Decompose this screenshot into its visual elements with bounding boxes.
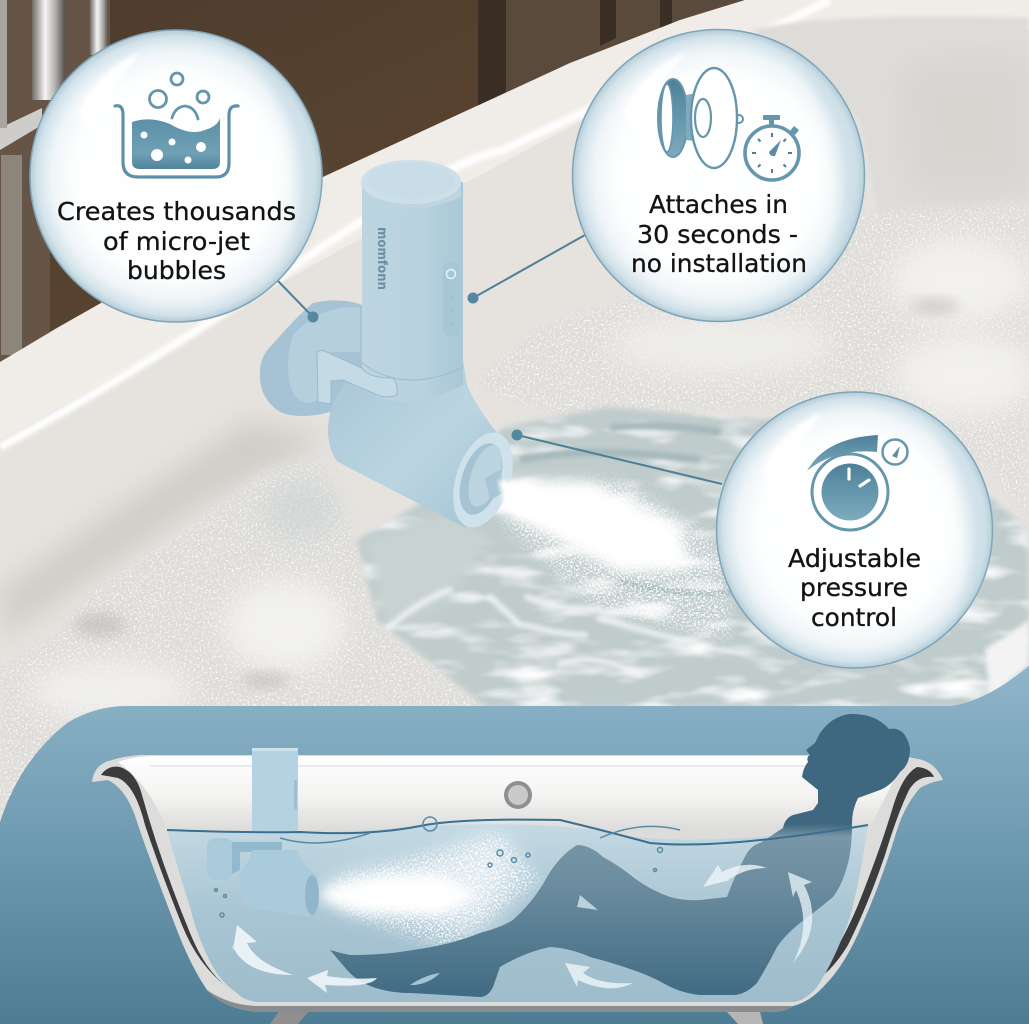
tub outer shell (92, 755, 943, 1012)
device cylinder above water (252, 748, 298, 832)
device elbow under water (207, 838, 319, 917)
bubble 2 text (631, 190, 807, 278)
foam left highlights (30, 480, 345, 718)
icon: pressure dial (807, 435, 908, 530)
room wall behind tub (0, 0, 745, 362)
bubble 3 text: Adjustable (788, 544, 921, 573)
water ripples (388, 590, 680, 675)
arrow: flow bottom-middle (565, 963, 633, 988)
suction mount (260, 300, 362, 416)
nozzle ring (442, 425, 524, 535)
foam right (470, 203, 1029, 530)
arrow: flow lower-left up (232, 925, 293, 975)
foam right highlights (610, 238, 1029, 415)
bubble 1 text: Creates thousands (57, 197, 296, 226)
bubble edge tint (255, 60, 316, 265)
panel: blue cross-section background (0, 666, 1029, 1024)
bubble: quick attach (572, 30, 864, 322)
icon: suction cup (658, 68, 743, 168)
bubble edge tint (930, 420, 986, 618)
woman silhouette (330, 714, 910, 997)
arrow: flow right circulating (788, 872, 812, 963)
brand name: momfonn (374, 227, 389, 290)
tub legs (270, 1010, 763, 1024)
diagram: bathtub cross-section (92, 714, 943, 1024)
gaps between limbs (410, 895, 598, 985)
arrow: flow upper-right left (703, 865, 767, 887)
surface waves and bubbles (214, 817, 680, 917)
icon: tub with bubbles (115, 73, 238, 177)
bubble 2 text: 30 seconds - (637, 220, 798, 249)
bubble 2 text: no installation (631, 249, 807, 278)
tile wall left (0, 0, 110, 362)
water body (167, 824, 868, 1002)
clamp arm (317, 350, 397, 404)
overflow drain (504, 781, 532, 809)
foam left (0, 460, 490, 840)
dark shell layer left (101, 767, 227, 987)
cylinder cap (361, 160, 461, 210)
tub inner wall top right (750, 16, 1029, 225)
bubble 2 text: Attaches in (649, 190, 788, 219)
elbow body (328, 360, 500, 528)
water surface line (167, 820, 868, 845)
flat clear water (365, 510, 490, 625)
curtains (478, 0, 745, 106)
cylinder body (362, 182, 463, 402)
tub outer grey underside (207, 990, 793, 1012)
arrow: flow bottom-left (307, 970, 377, 993)
callout line 1 (278, 281, 318, 322)
bubble 3 text: control (811, 603, 897, 632)
callout line 2 (468, 235, 585, 304)
spray in tub (322, 832, 540, 950)
bubble gloss (78, 52, 140, 130)
bubble gloss (622, 52, 685, 130)
dark shell layer right (808, 767, 934, 985)
bubble: pressure control (716, 392, 992, 668)
bubble edge tint (798, 60, 859, 265)
jet spray over nozzle (498, 480, 570, 525)
bubble 3 text (788, 544, 921, 632)
water jet spray (490, 480, 730, 640)
rim highlight (0, 0, 830, 447)
water pool (357, 405, 1029, 708)
tub rim (0, 0, 1029, 440)
water dark bands (520, 426, 750, 593)
bubble 1 text: of micro-jet (103, 227, 250, 256)
bubble 3 text: pressure (800, 573, 908, 602)
bubble gloss (762, 412, 822, 488)
product: wall-mounted jet device (260, 160, 524, 535)
tub interior back wall (118, 756, 905, 830)
chrome faucet pipes (0, 0, 108, 355)
icon: stopwatch (745, 115, 799, 180)
bubble 1 text: bubbles (127, 256, 226, 285)
water bottom right highlights (985, 620, 1029, 698)
bubble: micro-jet bubbles (30, 30, 322, 322)
callout line 3 (512, 430, 722, 484)
tub inner wall shade left (0, 420, 330, 640)
control panel with power button and level lights (443, 262, 460, 337)
bubble 1 text (57, 197, 296, 285)
